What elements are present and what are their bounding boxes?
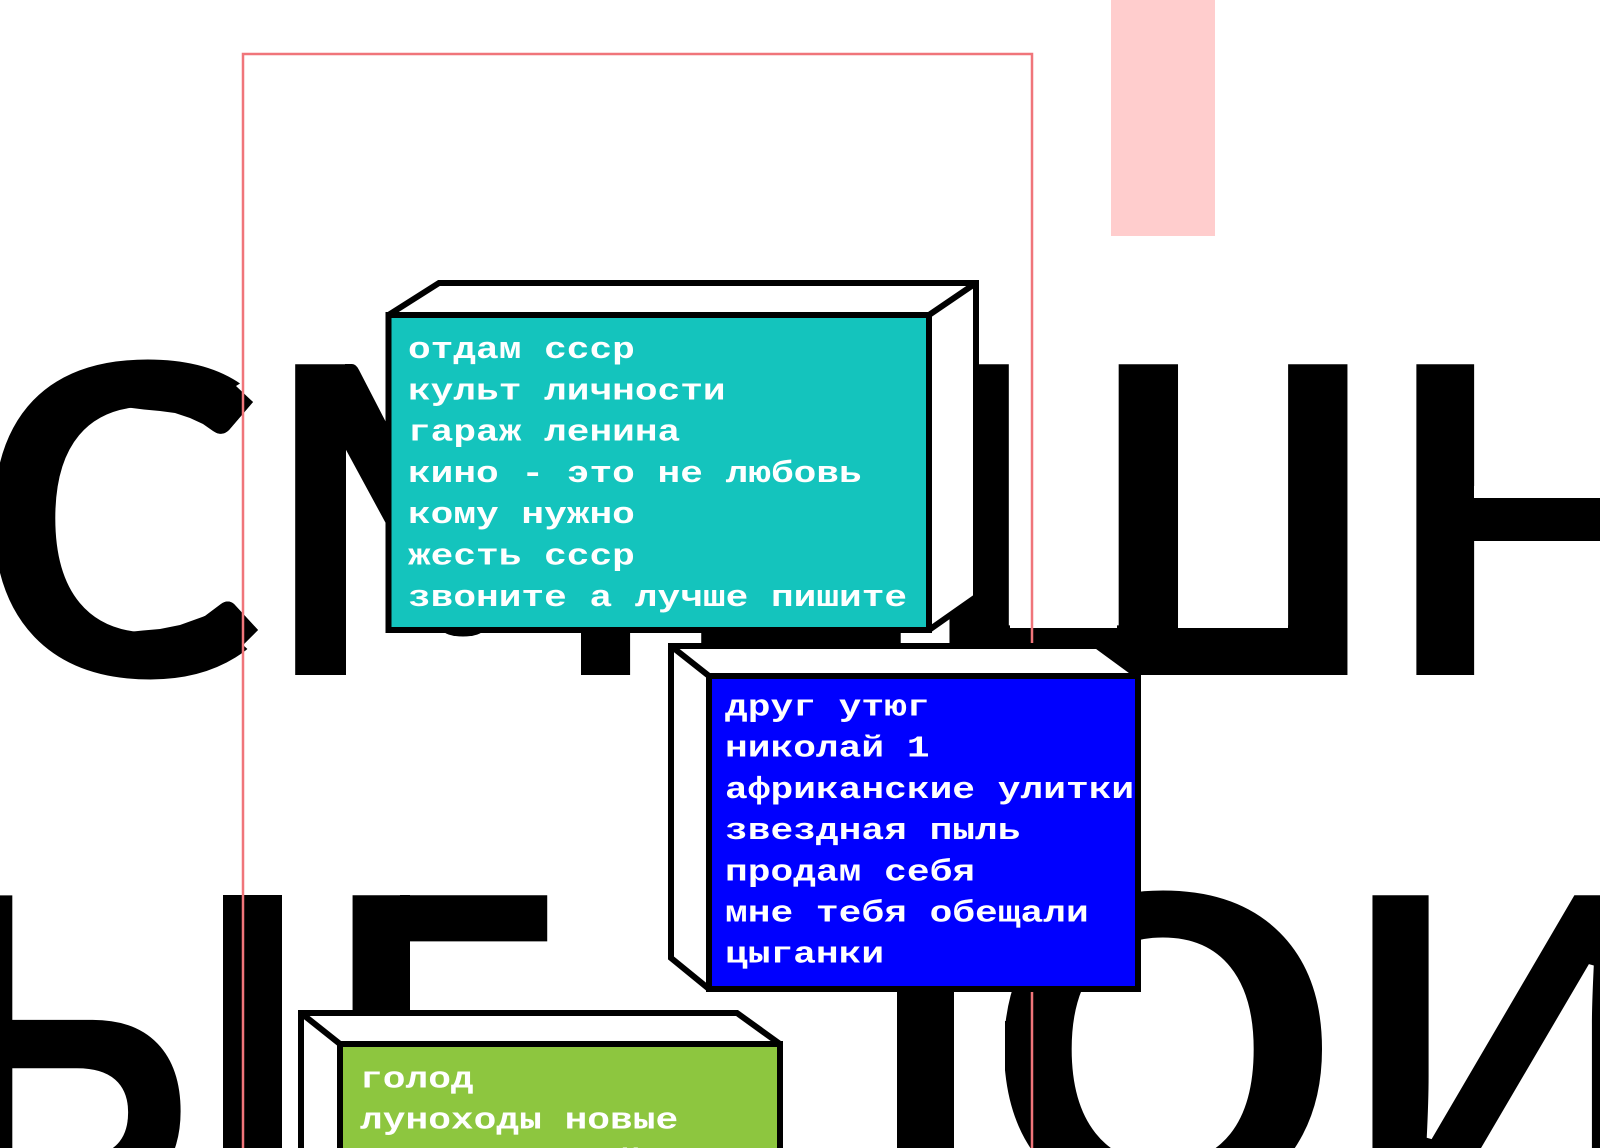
- teal box text: отдам ссср: [408, 333, 635, 368]
- blue box text: африканские улитки: [725, 773, 1134, 808]
- teal box text: культ личности: [408, 374, 726, 409]
- green box text: голод: [360, 1062, 474, 1097]
- green box text: [360, 1062, 678, 1148]
- blue box text: мне тебя обещали: [725, 896, 1089, 931]
- blue box text: продам себя: [725, 855, 975, 890]
- teal box text: гараж ленина: [408, 415, 680, 450]
- teal box text: [408, 333, 907, 616]
- big headline line 2: [0, 793, 1600, 1148]
- teal box text: жесть ссср: [408, 539, 635, 574]
- blue box text: [725, 690, 1134, 973]
- big headline line 1: Ш: [916, 262, 1381, 775]
- teal box text: звоните а лучше пишите: [408, 581, 907, 616]
- teal box text: кино - это не любовь: [408, 457, 862, 492]
- green box text: луноходы новые: [360, 1103, 678, 1138]
- box: green list: [301, 1013, 780, 1148]
- teal box text: кому нужно: [408, 498, 635, 533]
- blue box text: николай 1: [725, 732, 930, 767]
- thin pink frame: [243, 54, 1032, 1148]
- blue box text: цыганки: [725, 938, 884, 973]
- box: teal list: [388, 283, 976, 630]
- big headline line 1: М: [260, 263, 665, 776]
- pink accent block: [1111, 0, 1215, 236]
- big headline line 1: [0, 262, 1600, 776]
- big headline line 1: Е: [675, 262, 917, 775]
- blue box text: друг утюг: [725, 690, 930, 725]
- box: blue list: [671, 646, 1138, 989]
- blue box text: звездная пыль: [725, 814, 1021, 849]
